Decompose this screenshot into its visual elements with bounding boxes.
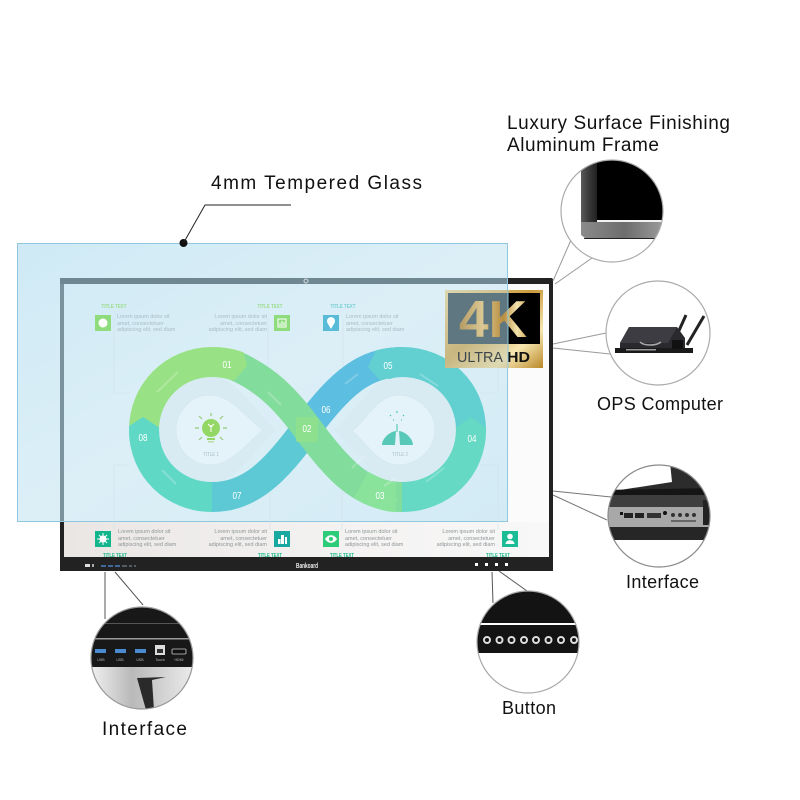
info block: bottom centre-right [323,529,404,559]
magnified USB and HDMI ports: USB [136,658,144,662]
info block: bottom centre-left: amet, consectetuer [220,536,267,542]
tempered glass panel [17,243,508,522]
infinity loop diagram [129,347,486,512]
magnified USB and HDMI ports: USB [116,658,124,662]
info block: bottom right [437,529,518,559]
badge: 4K Ultra HD: 4K [459,291,527,349]
step numbers: 02 [302,424,312,435]
step numbers: 04 [468,434,477,445]
info block: top left: amet, consectetuer [117,321,164,327]
step numbers: 06 [322,405,331,416]
callout: aluminum frame [507,113,730,284]
magnified USB and HDMI ports: HDMI [175,658,183,662]
camera dot [304,279,308,283]
infographic canvas [17,115,729,735]
info block: bottom centre-right: TITLE TEXT [330,553,354,559]
info block: bottom centre-right: adipiscing elit, sed diam [345,542,404,548]
info block: bottom right: amet, consectetuer [448,536,495,542]
magnified side ports [608,467,710,540]
info block: top centre-right: TITLE TEXT [330,304,356,310]
badge: 4K Ultra HD [445,290,543,368]
info block: top centre-left: TITLE TEXT [258,304,283,310]
callout: buttons [475,571,581,718]
info block: bottom centre-left: TITLE TEXT [258,553,282,559]
OPS label: OPS Computer [597,394,723,414]
info block: bottom left: amet, consectetuer [118,536,165,542]
info block: top centre-right: Lorem ipsum dolor sit [346,314,399,320]
label: title 1: TITLE 1 [203,452,219,458]
info block: bottom right: adipiscing elit, sed diam [437,542,495,548]
badge: 4K Ultra HD: ULTRA [457,349,503,366]
right teardrop [334,376,456,484]
step numbers: 07 [232,491,242,502]
monitor frame [60,278,553,571]
info block: bottom right: Lorem ipsum dolor sit [442,529,495,535]
info block: bottom centre-right: Lorem ipsum dolor sit [345,529,398,535]
info block: bottom centre-left: Lorem ipsum dolor sit [214,529,267,535]
screen: connector outlines [114,318,498,530]
callout: 4mm tempered glass: 4mm Tempered Glass [211,173,422,194]
info block: top centre-right: amet, consectetuer [346,321,393,327]
label: title 2: TITLE 2 [392,452,408,458]
logo: Bankoard [296,563,318,570]
info block: bottom left [95,529,177,559]
interface label: Interface [626,572,699,592]
info block: top left: TITLE TEXT [102,304,127,310]
left teardrop [156,376,276,484]
info block: bottom centre-left: adipiscing elit, sed diam [209,542,267,548]
info block: top left [95,304,176,333]
pointer lines [553,333,610,354]
info block: top centre-right [323,304,405,333]
info block: top centre-right: adipiscing elit, sed diam [346,327,405,333]
faint band highlights [157,372,444,486]
info block: bottom left: Lorem ipsum dolor sit [118,529,171,535]
step numbers: 03 [376,491,385,502]
step numbers: 05 [384,361,393,372]
info block: top centre-left: Lorem ipsum dolor sit [214,314,267,320]
frame heading: Luxury Surface Finishing [507,113,730,134]
info block: top left: adipiscing elit, sed diam [117,327,176,333]
step numbers [138,360,477,502]
badge: 4K Ultra HD: HD [507,349,530,366]
callout: OPS computer [553,281,723,414]
callout: 4mm tempered glass [180,173,422,247]
callout: aluminum frame: Aluminum Frame [507,135,659,156]
button label: Button [502,698,556,718]
info block: top centre-left: adipiscing elit, sed diam [209,327,267,333]
magnified frame corner [570,160,662,240]
icon: lungs [382,411,413,445]
magnified button row [478,592,578,653]
pointer lines [105,572,143,619]
step numbers: 01 [222,360,232,371]
pointer lines [492,571,527,603]
callout: front interface [90,572,195,740]
chevron tips, trimmed to the band [129,348,486,511]
step numbers: 08 [138,433,148,444]
info block: top centre-left: amet, consectetuer [220,321,267,327]
interface label: Interface [102,719,187,740]
info block: bottom centre-right: amet, consectetuer [345,536,392,542]
magnified USB and HDMI ports: Touch [155,658,165,662]
bottom bezel controls [60,557,553,571]
info block: top centre-left [209,304,290,333]
pointer lines [553,240,592,284]
magnified USB and HDMI ports: USB [97,658,105,662]
info block: bottom left: adipiscing elit, sed diam [118,542,177,548]
info block: bottom centre-left [209,529,290,559]
callout: right interface [553,462,720,592]
info block: bottom right: TITLE TEXT [486,553,510,559]
pointer lines [553,491,611,520]
magnified USB and HDMI ports [90,605,195,712]
info block: bottom left: TITLE TEXT [103,553,127,559]
icon: light bulb [195,413,227,442]
info block: top left: Lorem ipsum dolor sit [117,314,170,320]
OPS device [615,315,704,353]
